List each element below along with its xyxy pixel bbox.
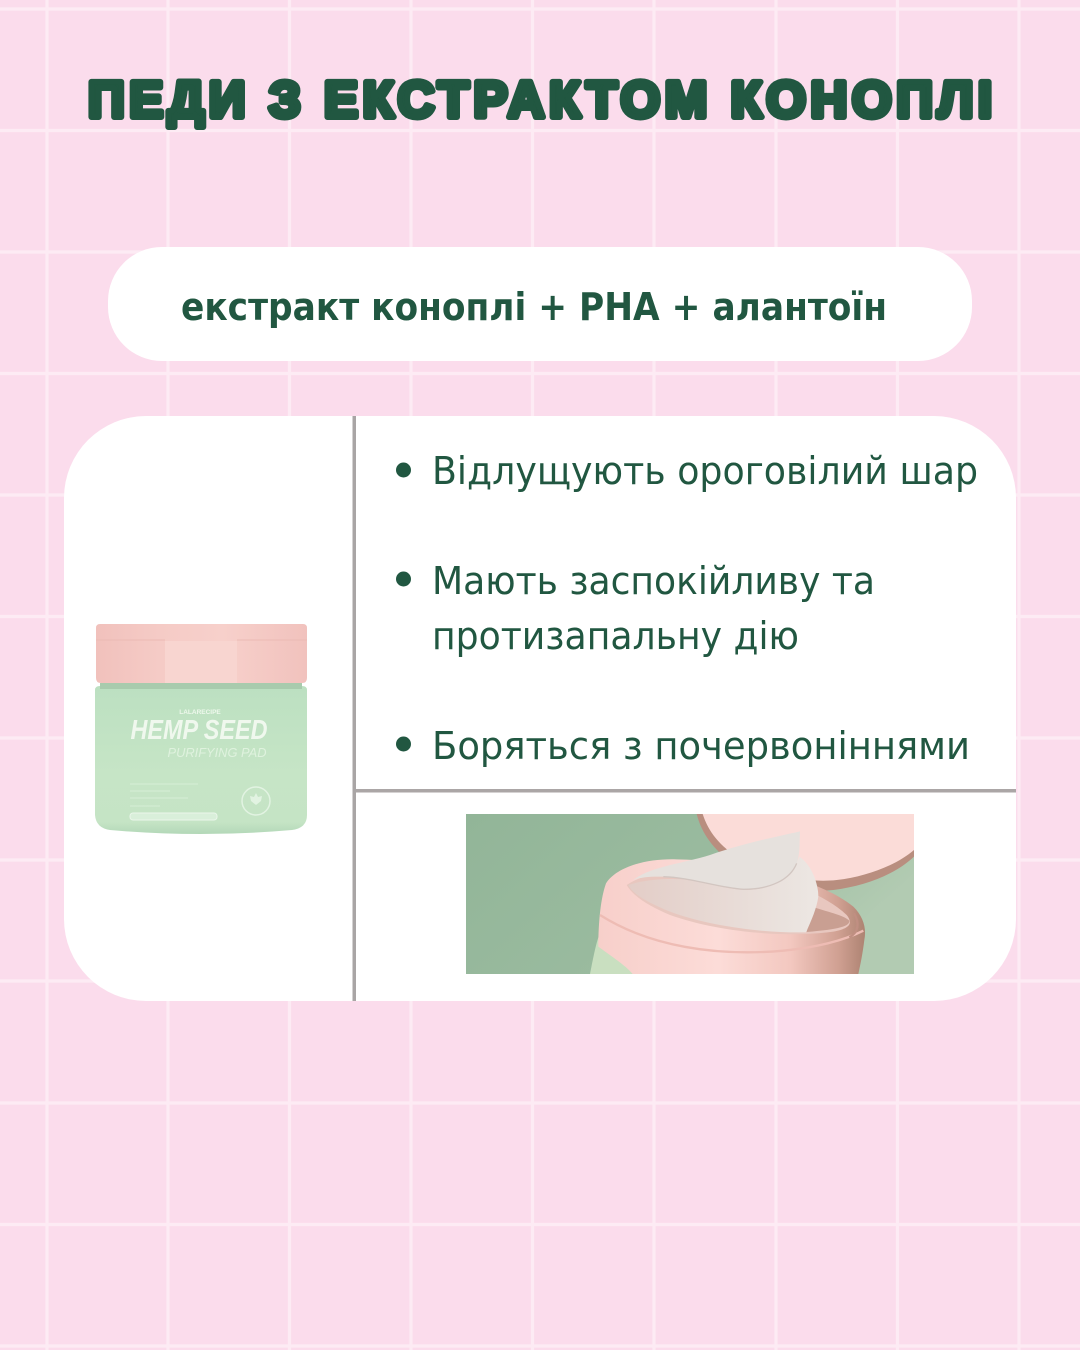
product photo: open jar with pad bbox=[466, 814, 914, 974]
product photo: jar: PURIFYING PAD bbox=[168, 745, 266, 760]
bullet list: Відлущують ороговілий шар bbox=[432, 449, 978, 493]
ingredients pill bbox=[108, 247, 972, 361]
ingredients text: екстракт коноплі + PHA + алантоїн bbox=[181, 285, 887, 329]
product photo: jar bbox=[95, 624, 307, 834]
bullet list: протизапальну дію bbox=[432, 614, 799, 658]
bullet list: Боряться з почервоніннями bbox=[432, 724, 970, 768]
bullet list bbox=[396, 449, 978, 768]
title: ПЕДИ З ЕКСТРАКТОМ КОНОПЛІ bbox=[88, 71, 992, 128]
main panel bbox=[64, 416, 1016, 1001]
product photo: jar: HEMP SEED bbox=[130, 714, 268, 745]
bullet list: Мають заспокійливу та bbox=[432, 559, 875, 603]
product photo: jar: LALARECIPE bbox=[179, 709, 221, 716]
